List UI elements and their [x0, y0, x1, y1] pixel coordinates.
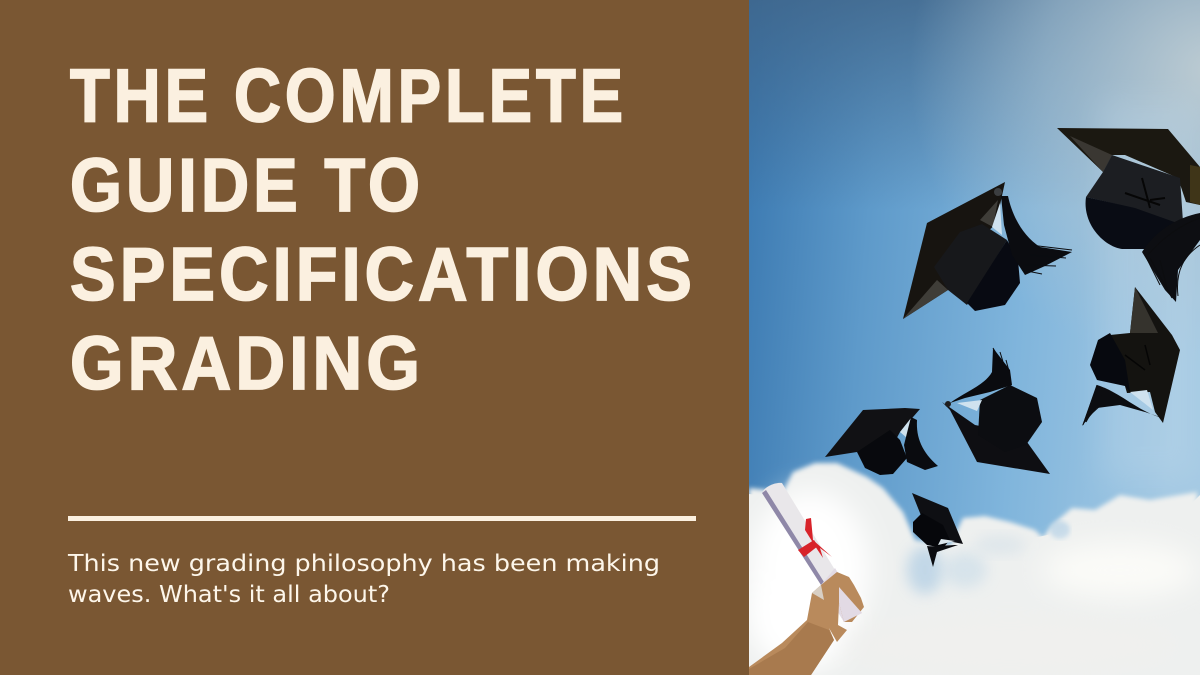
- tassel: [1082, 385, 1163, 426]
- tassel: [1001, 196, 1072, 275]
- panel: graduation photo: [749, 0, 1200, 675]
- icon: cap top right: [1057, 128, 1200, 302]
- icon: diploma scroll: [762, 483, 862, 622]
- title: [70, 54, 696, 405]
- icon: arm and hand: [749, 572, 864, 675]
- panel: brown title panel: [0, 0, 749, 675]
- icon: cap upper centre: [903, 182, 1072, 319]
- subtitle text: This new grading philosophy has been making: [67, 551, 660, 577]
- icon: cap middle right: [1082, 287, 1180, 426]
- ribbon: [798, 518, 832, 558]
- title: SPECIFICATIONS: [70, 232, 696, 316]
- divider rule: [68, 516, 696, 521]
- title: THE COMPLETE: [70, 54, 627, 138]
- tassel: [1142, 213, 1200, 302]
- subtitle text: waves. What's it all about?: [68, 582, 390, 608]
- title: GRADING: [70, 321, 424, 405]
- tassel: [904, 417, 938, 470]
- icon: cap lower left: [825, 408, 938, 475]
- clouds: [749, 463, 1200, 675]
- icon: small cap: [912, 493, 963, 567]
- icon: cap centre: [942, 348, 1050, 474]
- tassel: [950, 348, 1012, 403]
- sky: [749, 0, 1200, 545]
- subtitle text: [67, 551, 660, 608]
- tassel: [927, 545, 958, 567]
- title: GUIDE TO: [70, 143, 424, 227]
